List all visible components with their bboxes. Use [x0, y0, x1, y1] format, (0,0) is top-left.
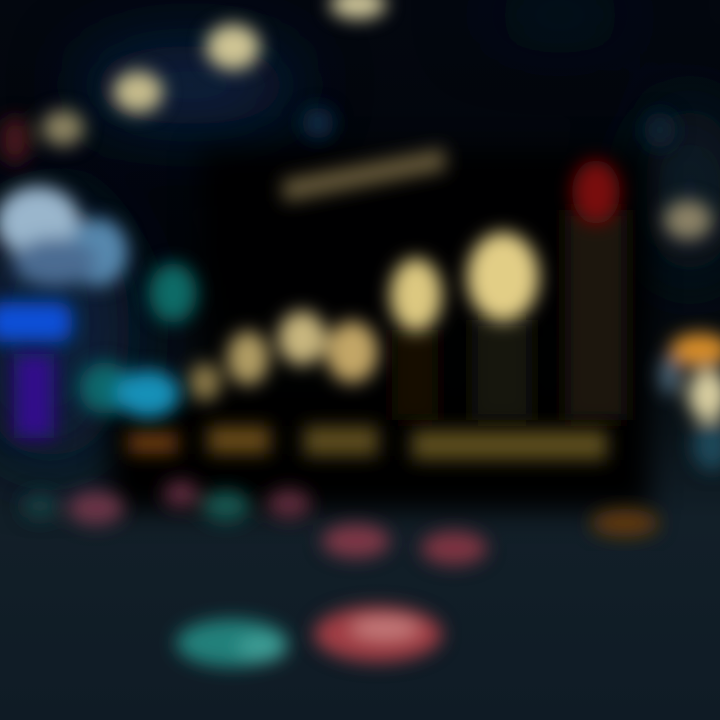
diagonal row of dots	[0, 0, 676, 164]
bar columns	[392, 210, 627, 420]
left cloud icon	[0, 186, 128, 286]
blue bar icon	[0, 302, 72, 342]
dark chart panel	[110, 150, 650, 510]
axis labels	[128, 426, 607, 460]
red bar top	[572, 160, 620, 224]
bar value markers	[189, 232, 539, 401]
right icon	[660, 200, 720, 471]
background glows	[0, 0, 720, 460]
teal circle icon	[149, 263, 197, 323]
large teal pill	[176, 619, 288, 667]
large red pill	[314, 606, 442, 662]
chart title	[282, 148, 446, 202]
bar chart	[128, 160, 627, 460]
cyan cloud icon	[79, 362, 180, 418]
orange tag	[591, 509, 659, 537]
small pills row	[22, 480, 487, 565]
purple block icon	[14, 354, 54, 438]
